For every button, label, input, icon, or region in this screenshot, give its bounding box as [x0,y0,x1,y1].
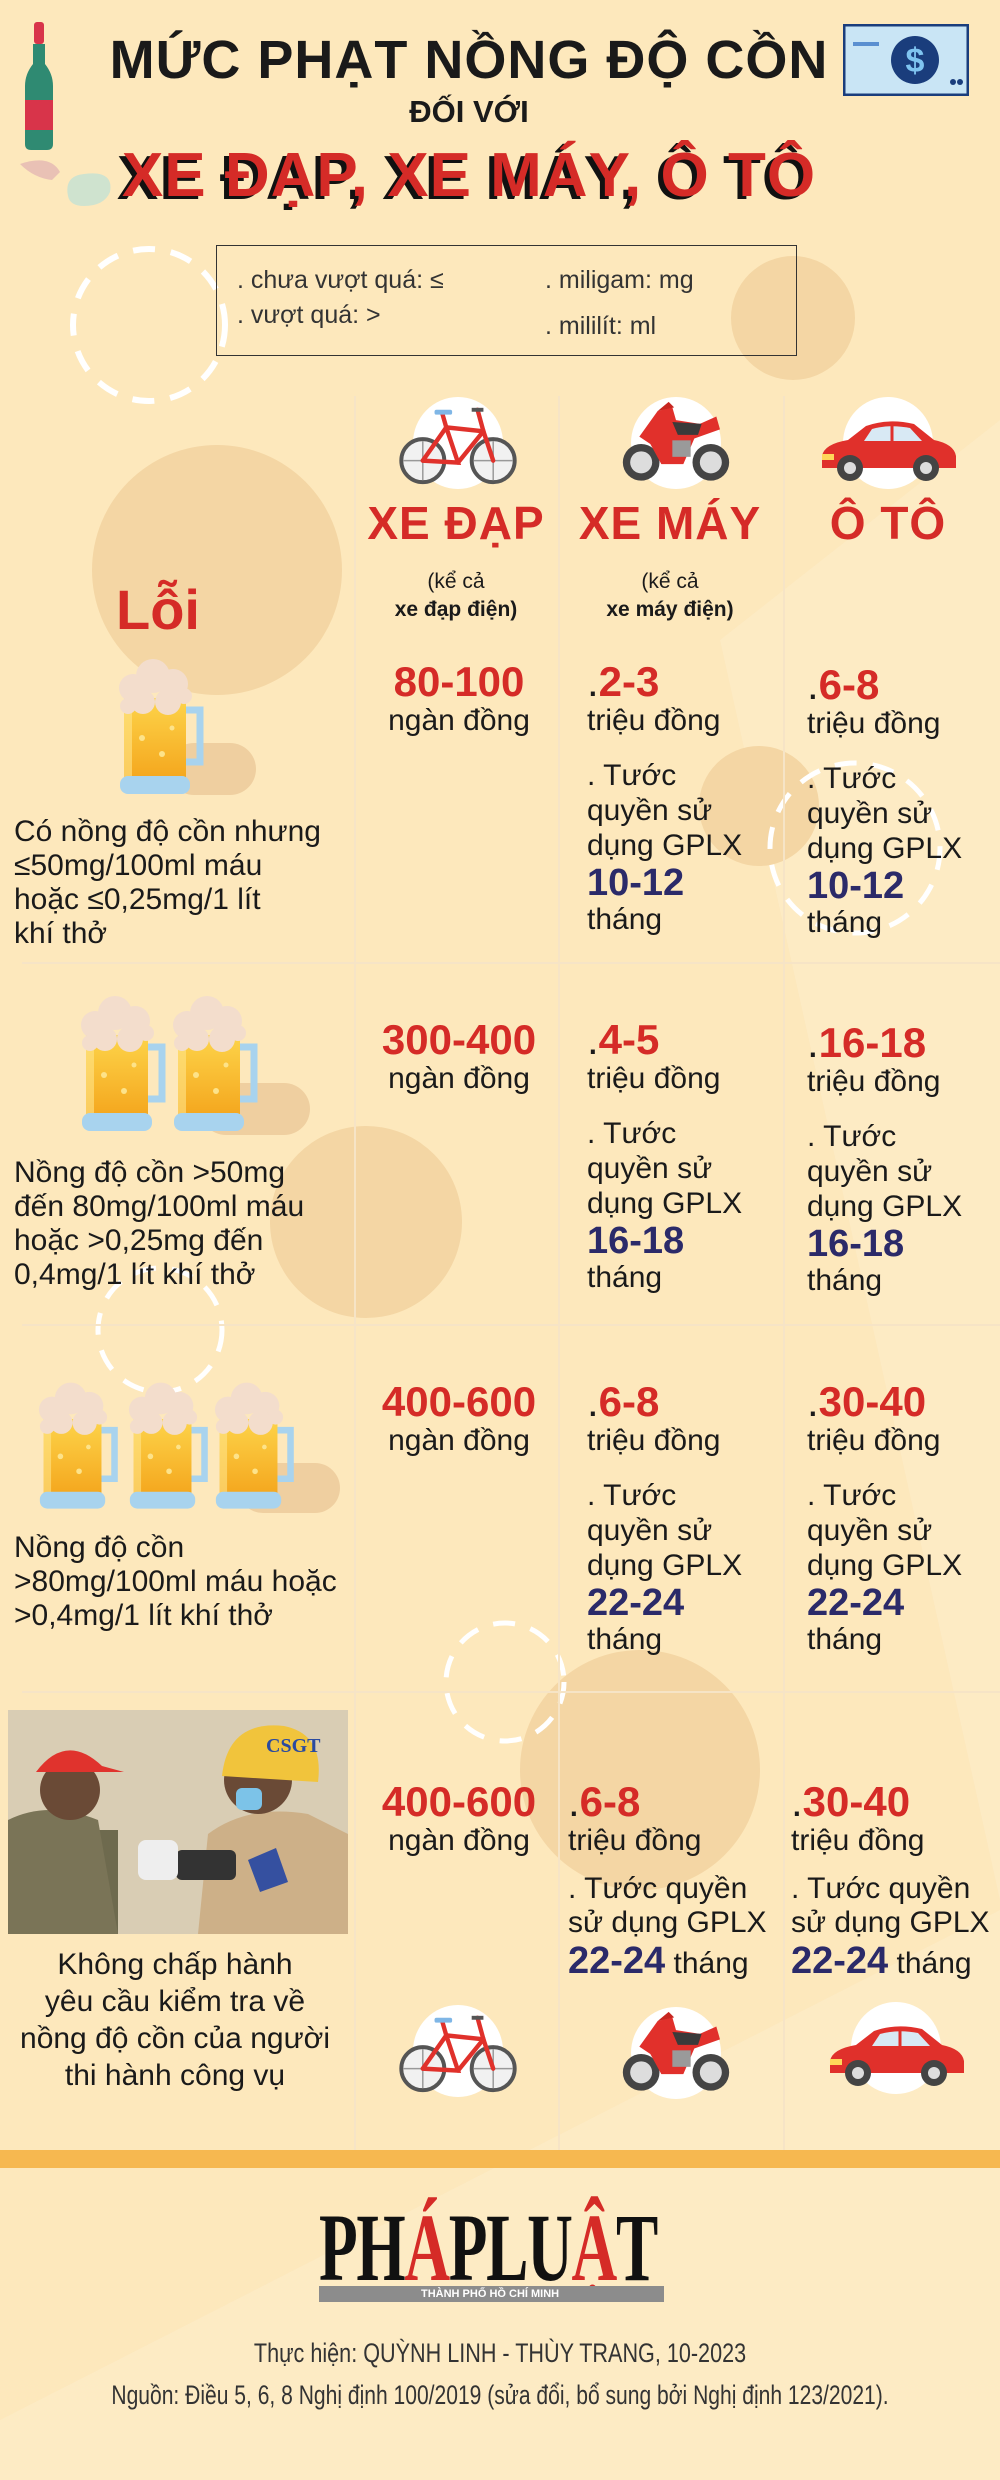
fine: motorbike: 22-24 tháng [568,1940,749,1982]
row 4 [8,1710,990,2099]
row 3 [14,1378,962,1656]
icon: two beers [81,996,310,1135]
legend box: . chưa vượt quá: ≤ [237,266,444,294]
fine: car: .30-40 [791,1778,910,1825]
fine: car: sử dụng GPLX [791,1906,990,1939]
icon: bicycle [399,2005,517,2097]
row 1 [14,658,962,950]
fine: car: triệu đồng [791,1824,924,1857]
title [110,30,828,210]
icon: one beer [119,659,256,795]
fine: car: quyền sử [807,1514,932,1547]
credits: Thực hiện: QUỲNH LINH - THÙY TRANG, 10-2023 [254,2338,746,2368]
icon: money bill [843,24,969,96]
fine: bicycle [382,1016,536,1095]
column header: xe may: (kể cả [641,570,699,593]
fine: motorbike: triệu đồng [587,1424,720,1457]
column header: o to: Ô TÔ [830,497,946,549]
violation text 1: hoặc ≤0,25mg/1 lít [14,883,261,916]
fine: bicycle: ngàn đồng [388,1424,530,1457]
violation text 4: thi hành công vụ [65,2059,285,2092]
violation text 3: >0,4mg/1 lít khí thở [14,1599,273,1632]
column header: o to [822,397,956,549]
legend box: . vượt quá: > [237,301,381,329]
fine: car: .6-8 [807,661,879,708]
fine: motorbike: . Tước quyền [568,1872,747,1905]
fine: car: . Tước [807,1120,896,1153]
violation text 4 [20,1948,330,2092]
fine: motorbike [568,1778,767,1982]
fine: car: . Tước quyền [791,1872,970,1905]
column header: xe may: xe máy điện) [606,598,734,621]
fine: car [807,1378,962,1656]
violation text 4: yêu cầu kiểm tra về [45,1985,305,2018]
logo: Phap Luat: PHÁPLUẬT [319,2194,657,2301]
violation text 1: ≤50mg/100ml máu [14,849,262,882]
violation text 3: Nồng độ cồn [14,1531,184,1564]
fine: motorbike: .6-8 [568,1778,640,1825]
fine: car [807,661,962,939]
fine: car: 16-18 [807,1223,904,1265]
fine: bicycle [382,1778,536,1857]
violation text 2: hoặc >0,25mg đến [14,1224,263,1257]
fine: bicycle [388,658,530,737]
fine: motorbike: .2-3 [587,658,659,705]
violation text 1: khí thở [14,917,107,950]
fine: bicycle: ngàn đồng [388,1824,530,1857]
fine: car: dụng GPLX [807,1190,962,1223]
column header: xe may [579,397,761,621]
violation text 2: Nồng độ cồn >50mg [14,1156,285,1189]
icon: three beers [39,1382,340,1513]
fine: car: triệu đồng [807,1424,940,1457]
credits [111,2338,889,2410]
fine: motorbike: . Tước [587,1479,676,1512]
fine: car: tháng [807,1264,882,1297]
fine: bicycle: ngàn đồng [388,704,530,737]
photo: police breath test [8,1710,348,1934]
fine: car [791,1778,990,1982]
fine: motorbike: .4-5 [587,1016,659,1063]
fine: car: tháng [807,1623,882,1656]
fine: motorbike: dụng GPLX [587,829,742,862]
fine: motorbike: .6-8 [587,1378,659,1425]
violation text 2: đến 80mg/100ml máu [14,1190,304,1223]
fine: car: quyền sử [807,1155,932,1188]
fine: car: dụng GPLX [807,832,962,865]
title: MỨC PHẠT NỒNG ĐỘ CỒN [110,30,828,90]
violation text 3 [14,1531,337,1632]
fine: motorbike: triệu đồng [587,1062,720,1095]
fine: bicycle: 400-600 [382,1778,536,1825]
photo: police breath test: CSGT [266,1735,321,1757]
orange band [0,2150,1000,2168]
legend box: . miligam: mg [545,266,694,294]
fine: motorbike: quyền sử [587,794,712,827]
violation text 1 [14,815,321,950]
fine: motorbike [587,1016,742,1294]
fine: car: 10-12 [807,865,904,907]
violation text 4: Không chấp hành [57,1948,293,1981]
fine: motorbike: triệu đồng [568,1824,701,1857]
fine: motorbike: dụng GPLX [587,1549,742,1582]
fine: car: .30-40 [807,1378,926,1425]
fine: bicycle: ngàn đồng [388,1062,530,1095]
column header: xe dap: XE ĐẠP [367,497,545,549]
fine: car: triệu đồng [807,1065,940,1098]
label: Loi: Lỗi [116,578,200,641]
fine: car: tháng [807,906,882,939]
fine: motorbike [587,658,742,936]
fine: bicycle: 400-600 [382,1378,536,1425]
row 2 [14,996,962,1297]
violation text 3: >80mg/100ml máu hoặc [14,1565,337,1598]
fine: bicycle [382,1378,536,1457]
fine: bicycle: 80-100 [394,658,524,705]
column header: xe may: XE MÁY [579,497,761,549]
icon: motorbike [622,2007,730,2099]
fine: car [807,1019,962,1297]
fine: motorbike: quyền sử [587,1514,712,1547]
fine: car: dụng GPLX [807,1549,962,1582]
fine: motorbike: quyền sử [587,1152,712,1185]
fine: motorbike: . Tước [587,1117,676,1150]
fine: motorbike [587,1378,742,1656]
credits: Nguồn: Điều 5, 6, 8 Nghị định 100/2019 (sửa đổi, bổ sung bởi Nghị định 123/2021). [111,2380,889,2410]
icon: money bill: $ [906,42,925,80]
fine: motorbike: triệu đồng [587,704,720,737]
fine: car: 22-24 [807,1582,904,1624]
logo: Phap Luat: THÀNH PHỐ HỒ CHÍ MINH [421,2288,559,2300]
icon: wine bottle [20,22,110,206]
violation text 2 [14,1156,304,1291]
fine: motorbike: tháng [587,1623,662,1656]
legend box: . mililít: ml [545,312,656,340]
fine: car: . Tước [807,1479,896,1512]
fine: car: .16-18 [807,1019,926,1066]
fine: motorbike: 22-24 [587,1582,684,1624]
fine: motorbike: 16-18 [587,1220,684,1262]
fine: car: triệu đồng [807,707,940,740]
violation text 4: nồng độ cồn của người [20,2022,330,2055]
icon: car [830,2002,964,2094]
title: XE ĐẠP, XE MÁY, Ô TÔ [122,141,816,210]
fine: car: quyền sử [807,797,932,830]
fine: motorbike: 10-12 [587,862,684,904]
violation text 1: Có nồng độ cồn nhưng [14,815,321,848]
fine: motorbike: tháng [587,903,662,936]
column header: xe dap: (kể cả [427,570,485,593]
fine: bicycle: 300-400 [382,1016,536,1063]
legend box [216,245,797,356]
column header: xe dap: xe đạp điện) [395,598,517,621]
fine: car: 22-24 tháng [791,1940,972,1982]
violation text 2: 0,4mg/1 lít khí thở [14,1258,255,1291]
fine: motorbike: . Tước [587,759,676,792]
title: ĐỐI VỚI [409,94,529,129]
column header: xe dap [367,397,545,621]
fine: motorbike: dụng GPLX [587,1187,742,1220]
fine: motorbike: tháng [587,1261,662,1294]
fine: motorbike: sử dụng GPLX [568,1906,767,1939]
fine: car: . Tước [807,762,896,795]
